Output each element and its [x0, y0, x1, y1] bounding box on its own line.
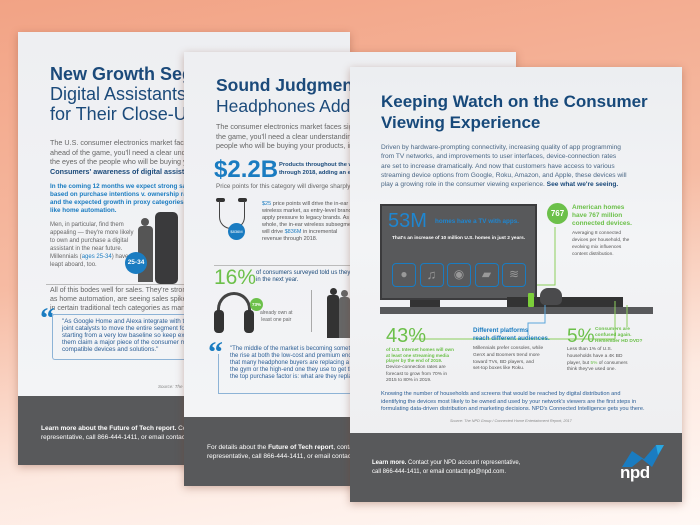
intro text doc1: The U.S. consumer electronics market faces significant change. To stay: [50, 138, 278, 147]
paragraph all of this: All of this bodes well for sales. They're strong and getting stronger. Categories such: [50, 287, 308, 294]
stat 43%: Device-connection rates are: [386, 365, 446, 370]
stat 16%: [214, 266, 409, 289]
men text: [50, 222, 134, 268]
quote doc2: the rise at both the low-cost and premium ends. What this tells us is: [230, 353, 409, 359]
title doc2: Sound Judgment:: [216, 75, 365, 95]
stat 5%: confused again.: [595, 333, 632, 338]
attribution doc2: Executive Director, Industry Analyst: [436, 407, 514, 413]
tv screen with 53M stat and app icons: homes have a TV with apps.: [435, 218, 519, 225]
intro doc2: people who will be buying your products, in the months ahead.: [216, 141, 415, 150]
tv screen with 53M stat and app icons: That's an increase of 10 million U.S. homes in just 2 years.: [392, 236, 525, 241]
stat 16%: of consumers surveyed told us they are likely to purchase: [256, 270, 409, 276]
intro doc3: Driven by hardware-prompting connectivity, increasing quality of app programming: [381, 144, 621, 151]
footer contact text: Learn more. Contact your NPD account representative,: [372, 460, 520, 466]
intro text doc1: ahead of the game, you'll need a clear understanding of the market through: [50, 148, 290, 156]
stat 43%: at least one streaming media: [386, 353, 449, 358]
stat 43%: forecast to grow from 70% in: [386, 372, 447, 376]
intro doc3: are set to increase dramatically. And now that customers have access to various: [381, 163, 615, 170]
stat 767 connected devices: devices per household, the: [572, 238, 629, 243]
stat $2.2B: Products throughout the wireless headphone market: [279, 162, 425, 168]
app icons row: [392, 263, 526, 287]
app icons row: ▰: [482, 267, 491, 281]
closing paragraph: Knowing the number of households and screens that would be reached by digital distribution and: [381, 391, 620, 397]
stat 767 connected devices: connected devices.: [572, 220, 632, 227]
footer doc2: For details about the Future of Tech report, contact your NPD account: [207, 444, 412, 451]
footer doc3: [350, 433, 682, 502]
stat 5%: Consumers are: [595, 327, 630, 332]
quote doc2: “: [208, 336, 223, 369]
app icons row: ≋: [509, 267, 519, 281]
blue highlight text: In the coming 12 months we expect strong sales: [50, 183, 195, 190]
document 3: consumer viewing experience: [350, 67, 682, 502]
earbuds text: wireless market, as entry-level brands: [262, 208, 354, 214]
source: Source: The NPD Group / Connected Home Entertainment Report, 2017: [450, 419, 572, 423]
stat $2.2B: $2.2B: [214, 156, 278, 183]
men text: assistant in the near future.: [50, 246, 122, 252]
earbuds text: will drive $836M in incremental: [262, 229, 337, 235]
different platforms: set-top boxes like Roku.: [473, 366, 524, 371]
men text: leapt aboard, too.: [50, 262, 97, 268]
earbuds text: whole, the in-ear wireless subsegment: [262, 222, 356, 228]
stat 5%: Less than 1% of U.S.: [567, 347, 612, 352]
document 1: digital assistants: [18, 32, 350, 465]
icon: people silhouettes: [327, 288, 350, 338]
men text: to own and purchase a digital: [50, 238, 128, 244]
quote doc2: the top purchase factor is: what are they replacing?": [230, 374, 368, 380]
closing paragraph: [381, 391, 644, 412]
quote doc2: [208, 336, 416, 394]
quote doc1: “: [40, 302, 55, 335]
stat 16%: in the next year.: [256, 277, 298, 283]
stat 767 connected devices: American homes: [572, 204, 624, 211]
closing paragraph: formulating data-driven distribution and marketing decisions. NPD's Connected Intelligence gets you there.: [381, 406, 644, 412]
quote doc1: compatible devices and solutions.": [62, 346, 158, 353]
title doc1: for Their Close-Up: [50, 104, 197, 124]
intro doc3: streaming device options from Google, Roku, Amazon, and Apple, these devices will: [381, 172, 627, 179]
logo npd: npd: [620, 463, 650, 482]
stat 767 connected devices: 767: [551, 209, 564, 218]
footer doc1: Learn more about the Future of Tech report. Contact your NPD account: [41, 425, 255, 432]
footer doc2: [184, 417, 516, 486]
stat 5%: [567, 326, 642, 372]
quote doc1: joint catalysts to move the entire segment forward. Voice assistants are: [62, 325, 260, 332]
men text: Men, in particular, find them: [50, 222, 124, 228]
stat $2.2B: [214, 156, 425, 183]
earbuds text: revenue through 2018.: [262, 236, 317, 242]
document 2: headphones: Price points for this category will diverge sharply based on type.: [216, 183, 393, 190]
blue highlight text: like home automation.: [50, 207, 116, 214]
icon: headphones: [214, 292, 263, 333]
title doc1: [50, 64, 243, 124]
title doc1: New Growth Segment:: [50, 64, 242, 84]
stat 5%: Remember HD DVD?: [595, 339, 642, 344]
stat 43%: player by the end of 2019.: [386, 358, 442, 363]
intro text doc1: Consumers' awareness of digital assistants is high.: [50, 166, 226, 176]
stat 5%: player, but 5% of consumers: [567, 361, 628, 366]
attribution doc2: [284, 400, 514, 421]
men text: Millennials (ages 25-34) have: [50, 254, 128, 260]
stat 767 connected devices: evolving mix influences: [572, 245, 621, 250]
document 2: headphones: already own at: [260, 310, 293, 316]
intro doc2: the game, you'll need a clear understanding of the market through the eyes of the: [216, 132, 475, 140]
quote doc1: [40, 302, 267, 360]
stat 767 connected devices: content distribution.: [572, 252, 614, 257]
quote doc1: them claim a major piece of the consumer market through: [62, 339, 223, 346]
earbuds text: $25 price points will drive the in-ear: [262, 201, 348, 207]
different platforms: Different platforms: [473, 327, 528, 334]
stat 43%: of U.S. Internet homes will own: [386, 347, 454, 352]
tv screen with 53M stat and app icons: [380, 204, 537, 300]
document 2: headphones: [184, 52, 516, 486]
quote doc1: "As Google Home and Alexa integrate with the smart home, they'll be the: [62, 318, 265, 325]
stat $2.2B: through 2018, adding an estimated amount: [279, 170, 397, 176]
intro doc3: play a growing role in the consumer viewing experience. See what we're seeing.: [381, 181, 618, 188]
earbuds text: [262, 201, 356, 242]
footer doc1: representative, call 866-444-1411, or email contactnpd@npd.com.: [41, 434, 231, 441]
intro text doc1: the eyes of the people who will be buying your products.: [50, 157, 229, 166]
title doc3: [381, 92, 648, 132]
icon: man and speaker: [125, 212, 178, 284]
stat 16%: 16%: [214, 266, 256, 289]
stat 5%: households have a 4K BD: [567, 354, 622, 359]
tv stand, shelf and devices: [380, 288, 653, 314]
attribution doc2: Ben Arnold: [487, 400, 514, 406]
stat 43%: 43%: [386, 325, 426, 347]
different platforms: Millennials prefer consoles, while: [473, 346, 543, 351]
different platforms: reach different audiences.: [473, 335, 550, 342]
stat 5%: think they've used one.: [567, 367, 616, 372]
closing paragraph: identifying the devices most likely to be owned and used by your network's viewers are the first steps in: [381, 398, 636, 404]
stat 767 connected devices: Averaging 8 connected: [572, 231, 621, 236]
stat 767 connected devices: have 767 million: [572, 212, 622, 219]
document 1: digital assistants: Source: The NPD Group: [158, 384, 207, 389]
app icons row: ♫: [427, 267, 436, 282]
paragraph all of this: [50, 286, 308, 312]
title doc2: Headphones Adding Up: [216, 96, 401, 116]
stat 767 connected devices: [547, 203, 632, 257]
icon: man and speaker: 25-34: [128, 259, 144, 266]
title doc2: [216, 75, 401, 116]
quote doc1: starting from a very low baseline so keep expectations realistic, but watch: [62, 332, 267, 339]
stat 43%: 2015 to 80% in 2019.: [386, 378, 431, 383]
paragraph all of this: as home automation, are seeing sales spikes, as well as digital assistants, and: [50, 296, 294, 303]
quote doc2: "The middle of the market is becoming something of a wasteland, with: [230, 346, 416, 352]
blue highlight text: and the expected growth in proxy categories: [50, 199, 184, 206]
footer contact text: [372, 460, 520, 475]
title doc1: Digital Assistants Ready: [50, 84, 243, 104]
quote doc2: that many headphone buyers are replacing a cheaper set they use at: [230, 360, 413, 366]
intro doc3: from TV networks, and improvements to user interfaces, device-connection rates: [381, 153, 616, 160]
footer doc2: representative, call 866-444-1411, or email contactnpd@npd.com.: [207, 453, 397, 460]
icon: earbuds: [216, 198, 247, 240]
attribution doc2: Source: The NPD Group/Future of Tech: [426, 414, 514, 420]
title doc3: Keeping Watch on the Consumer: [381, 92, 648, 111]
document 2: headphones: least one pair: [261, 317, 291, 323]
stat 5%: 5%: [567, 326, 594, 347]
men text: appealing — they're more likely: [50, 230, 134, 236]
blue highlight text: [50, 183, 198, 214]
icon: headphones: 73%: [252, 302, 261, 307]
different platforms: toward TVs, BD players, and: [473, 360, 534, 365]
footer contact text: call 866-444-1411, or email contactnpd@npd.com.: [372, 469, 506, 475]
intro doc2: [216, 122, 475, 150]
intro text doc1: [50, 138, 290, 176]
different platforms: [473, 327, 550, 371]
title doc3: Viewing Experience: [381, 113, 540, 132]
connector lines: [411, 227, 628, 340]
paragraph all of this: in certain traditional tech categories as manufacturers converge.: [50, 305, 249, 312]
intro doc3: [381, 144, 627, 188]
attribution doc1: [133, 365, 353, 381]
different platforms: GenX and Boomers trend more: [473, 353, 540, 358]
icon: earbuds: $836M: [230, 229, 243, 234]
app icons row: ●: [400, 267, 408, 281]
earbuds text: apply pressure to legacy brands. As a: [262, 215, 354, 221]
footer doc1: [18, 396, 350, 465]
app icons row: ◉: [454, 267, 464, 281]
blue highlight text: based on purchase intentions v. ownership rates,: [50, 191, 198, 198]
logo npd: [620, 445, 664, 482]
tv screen with 53M stat and app icons: 53M: [388, 210, 427, 232]
intro doc2: The consumer electronics market faces significant change. To stay ahead of: [216, 122, 458, 131]
quote doc2: the gym or the high-end one they use to get through commutes, so: [230, 367, 407, 373]
stat 43%: [386, 325, 454, 383]
